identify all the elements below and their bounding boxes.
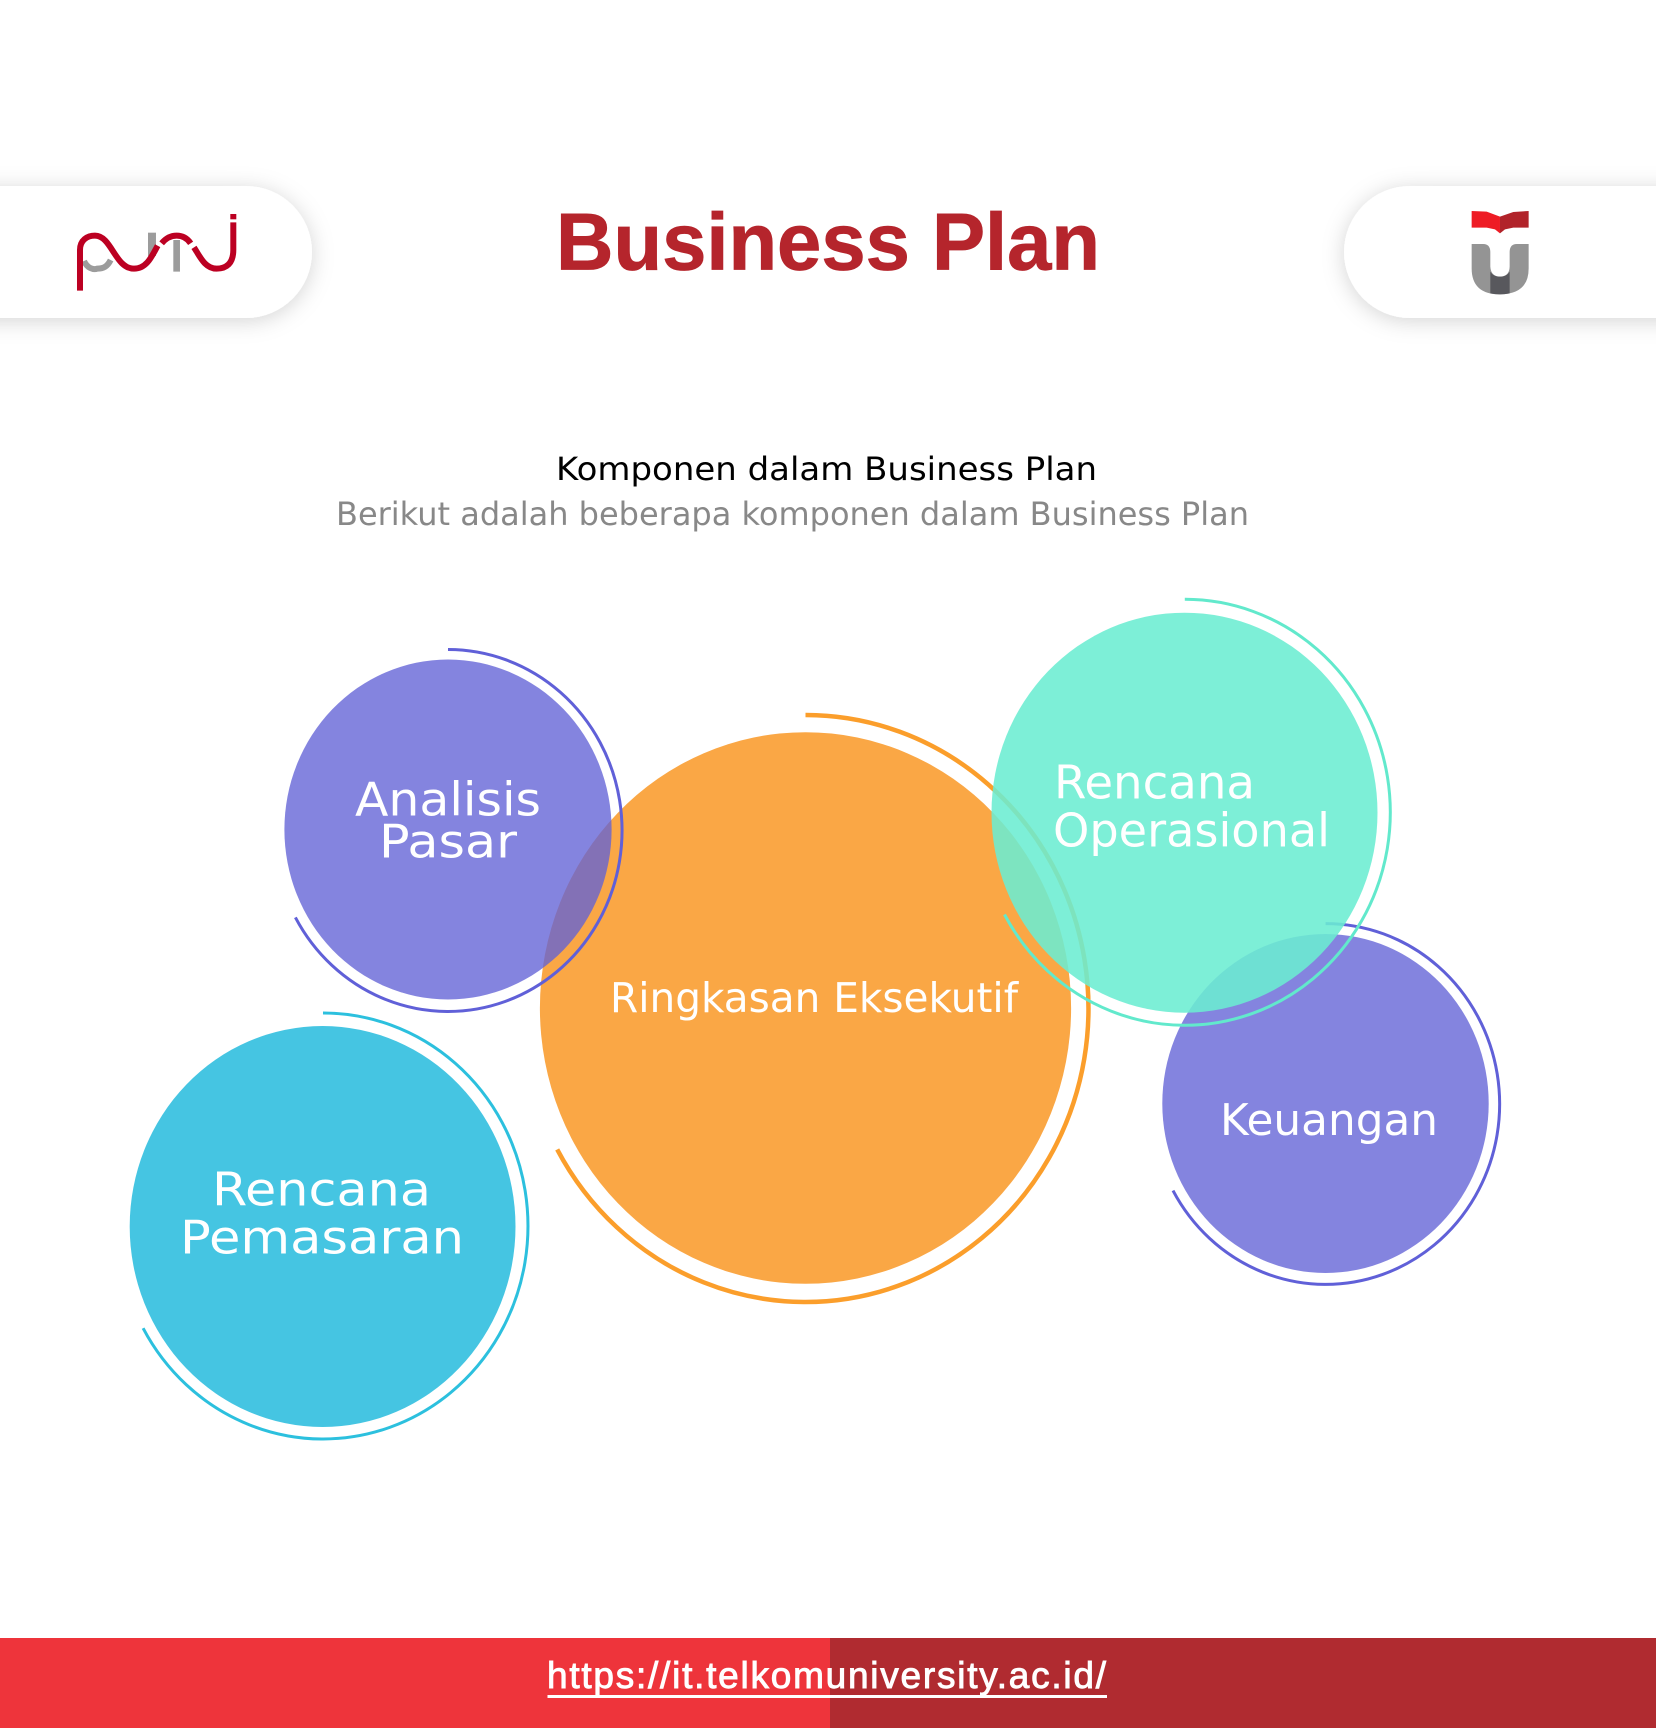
title: Business Plan xyxy=(556,198,1100,288)
circle: Analisis Pasar xyxy=(284,650,622,1012)
circle: Rencana Operasional xyxy=(992,599,1390,1025)
icon: telkom university logo xyxy=(1472,211,1529,294)
footer bar xyxy=(0,1638,1656,1728)
description: Berikut adalah beberapa komponen dalam Business Plan xyxy=(336,495,1249,533)
circle: Rencana Pemasaran: Rencana xyxy=(212,1162,431,1216)
circle: Keuangan: Keuangan xyxy=(1220,1095,1438,1146)
circle: Rencana Pemasaran: Pemasaran xyxy=(180,1210,464,1264)
subtitle: Komponen dalam Business Plan xyxy=(556,450,1097,488)
circle: Rencana Pemasaran xyxy=(130,1013,528,1439)
circle: Analisis Pasar: Pasar xyxy=(379,814,517,868)
icon: puri logo xyxy=(80,214,236,291)
circle: Rencana Operasional: Operasional xyxy=(1053,804,1330,858)
circle: Rencana Operasional: Rencana xyxy=(1054,756,1255,810)
footer link: https://it.telkomuniversity.ac.id/ xyxy=(547,1655,1107,1696)
circle: Analisis Pasar: Analisis xyxy=(355,772,541,826)
circle: Keuangan xyxy=(1162,924,1500,1284)
panel: left logo pill xyxy=(0,186,312,318)
circle: Ringkasan Eksekutif: Ringkasan Eksekutif xyxy=(610,974,1020,1022)
circle: Ringkasan Eksekutif xyxy=(540,715,1088,1302)
panel: right logo pill xyxy=(1344,186,1656,318)
